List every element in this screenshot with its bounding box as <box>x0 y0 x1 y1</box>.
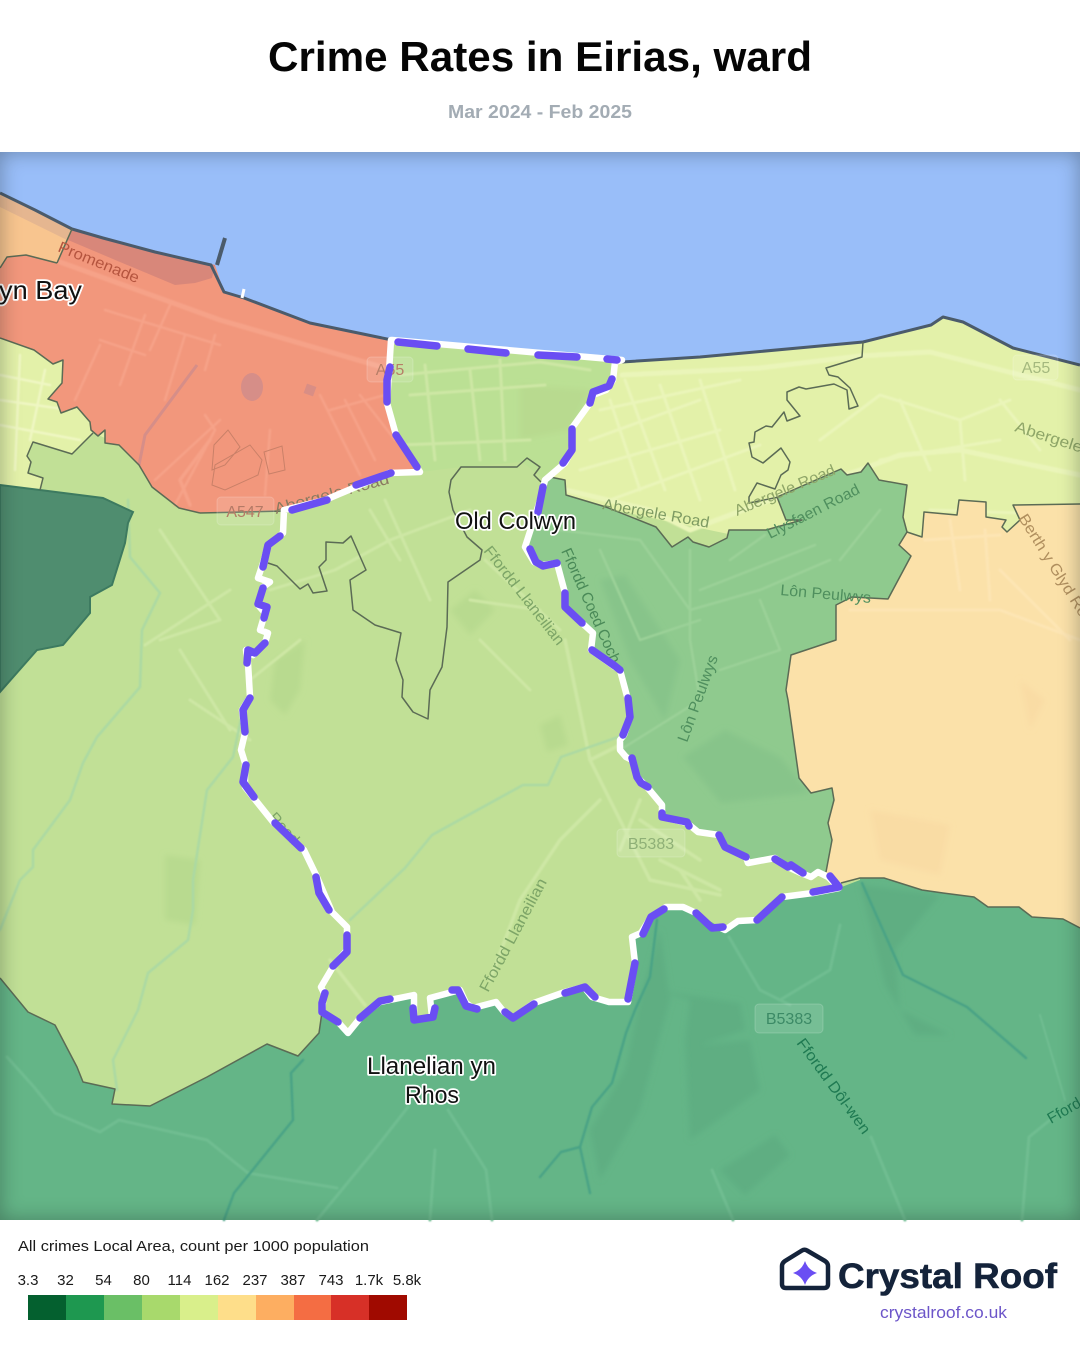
shield labels: B5383 <box>628 836 674 853</box>
place labels: Llanelian yn <box>367 1053 496 1080</box>
southern roads <box>7 925 1065 1220</box>
icon: purple crystal star <box>793 1261 817 1285</box>
road shields <box>217 355 1058 1033</box>
peach area detail <box>850 520 1080 640</box>
north-east pale roads <box>566 352 1080 530</box>
legend values: 237 <box>242 1272 268 1289</box>
central streams <box>0 500 624 1090</box>
road name labels <box>56 239 1080 1138</box>
legend values: 54 <box>95 1272 112 1289</box>
region: peach south-east <box>786 500 1080 928</box>
legend values: 162 <box>204 1272 230 1289</box>
legend values <box>18 1272 422 1289</box>
legend <box>18 1238 422 1320</box>
coastline <box>0 193 1080 365</box>
region boundary lines <box>0 229 1080 1106</box>
stadium outlines <box>212 430 285 490</box>
region: pale yellow west <box>0 335 110 490</box>
ward boundary: purple dashes <box>243 342 839 1022</box>
Eirias ward boundary <box>241 340 839 1033</box>
legend title: All crimes Local Area, count per 1000 population <box>18 1238 369 1255</box>
brand logo <box>782 1250 1057 1322</box>
place labels: Old Colwyn <box>455 508 576 535</box>
region: central light green area <box>0 330 860 1106</box>
region: medium green east of ward <box>525 463 911 877</box>
stream through park <box>139 365 197 465</box>
road name labels: Promenade <box>56 239 142 287</box>
road name labels: Abergele <box>1013 419 1080 456</box>
southern rivers <box>224 883 1026 1220</box>
region: southern green area <box>0 780 1080 1220</box>
sea <box>0 152 1080 452</box>
legend values: 743 <box>318 1272 344 1289</box>
region: salmon Colwyn Bay <box>0 229 420 513</box>
road name labels: Lôn Peulwys <box>675 653 722 744</box>
legend values: 5.8k <box>393 1272 422 1289</box>
icon: house outline <box>782 1250 828 1288</box>
place labels: Rhos <box>405 1082 459 1109</box>
medium green darker woodland <box>600 575 809 803</box>
road name labels: Abergele Road <box>601 496 711 532</box>
road name labels: Ffordd Dôl-wen <box>793 1035 874 1138</box>
pond <box>304 384 316 396</box>
road name labels: Lôn Peulwys <box>780 582 872 607</box>
salmon area roads <box>60 262 395 505</box>
road name labels: Ffordd Coed Coch <box>557 546 623 666</box>
central darker field patches <box>165 385 590 925</box>
region: orange north-west <box>0 193 72 268</box>
shield labels: A55 <box>376 362 404 379</box>
legend values: 80 <box>133 1272 150 1289</box>
beach overlay <box>0 193 72 240</box>
southern green darker woods <box>590 885 950 1195</box>
shield labels: A55 <box>1022 360 1050 377</box>
central light roads <box>145 360 720 1005</box>
road name labels: Ffordd Llaneilian <box>477 876 551 995</box>
legend values: 114 <box>168 1272 191 1289</box>
legend values: 32 <box>57 1272 74 1289</box>
map panel <box>0 152 1080 1220</box>
legend values: 3.3 <box>18 1272 38 1289</box>
road name labels: Road <box>265 809 302 848</box>
beach on salmon <box>68 229 215 285</box>
lake <box>241 373 263 401</box>
shield labels <box>226 360 1050 1028</box>
region: north ward green patch <box>387 345 615 480</box>
place labels <box>0 275 576 1109</box>
peach darker patches <box>870 680 1045 875</box>
region: dark green west <box>0 485 133 692</box>
road name labels: Llysfaen Road <box>764 481 863 543</box>
region: pale yellow north-east <box>545 317 1080 570</box>
legend colour bar <box>28 1295 407 1320</box>
place labels: yn Bay <box>0 275 82 305</box>
legend values: 1.7k <box>355 1272 384 1289</box>
road name labels: Abergele Road <box>273 471 391 518</box>
west pale area roads <box>0 355 80 470</box>
subtitle: date range: Mar 2024 - Feb 2025 <box>448 101 632 122</box>
road name labels: Abergele Road <box>732 462 838 520</box>
website: crystalroof.co.uk <box>880 1304 1008 1322</box>
ward boundary: white casing <box>241 340 839 1033</box>
road name labels: Ffordd Llaneilian <box>480 543 568 649</box>
shield labels: B5383 <box>766 1011 812 1028</box>
brand name: Crystal Roof <box>838 1257 1057 1296</box>
legend values: 387 <box>280 1272 306 1289</box>
jetty markers <box>242 289 244 298</box>
title: Crime Rates in Eirias, ward <box>268 33 812 80</box>
medium green roads <box>560 510 880 750</box>
shield labels: A547 <box>226 504 264 521</box>
